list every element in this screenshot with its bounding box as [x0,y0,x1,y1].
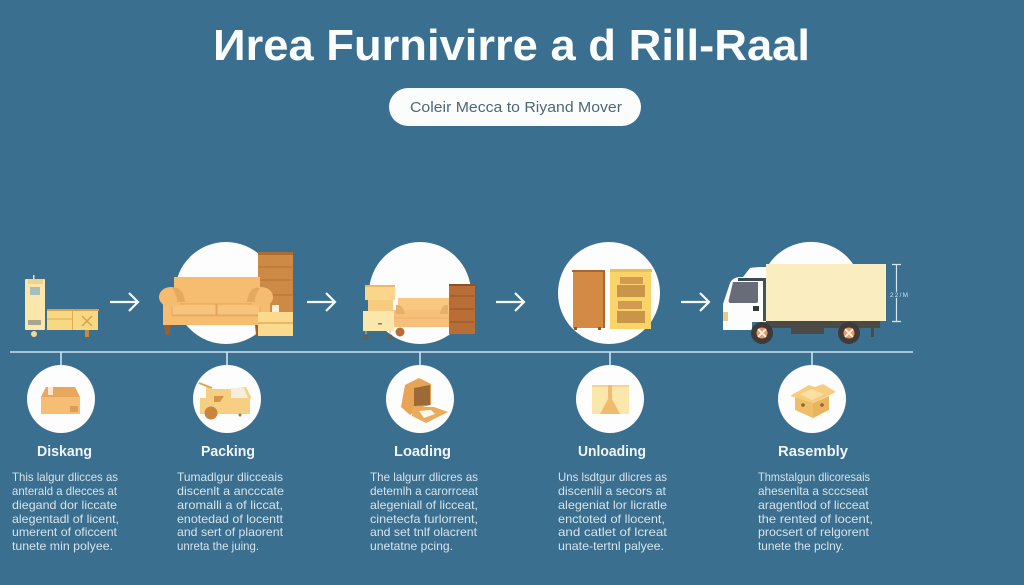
description: procsert of relgorent [758,525,870,539]
step 3: Loading: Loading [394,443,451,460]
description: This lalgur dlicces as [12,470,118,484]
description: unate-tertnl palyee. [558,539,664,553]
description: unreta the juing. [177,539,259,553]
icon: open carton [778,365,846,433]
step 3: Loading [370,365,479,553]
step 1: Diskang [12,365,119,553]
description [758,470,873,553]
description: enotedad of locentt [177,512,284,526]
dimension marker [890,264,908,322]
arrow 2 [307,293,335,311]
circle illustration: wardrobe and shelf [558,242,660,344]
description: enctoted of llocent, [558,512,665,526]
step 2: Packing [177,365,284,553]
subtitle pill: Coleir Mecca to Riyand Mover [410,99,622,116]
description: cinetecfa furlorrent, [370,512,478,526]
description: alegeniall of licceat, [370,498,478,512]
description: The lalgurr dlicres as [370,470,478,484]
description: tunete min polyee. [12,539,113,553]
arrow 4 [681,293,709,311]
step 2: Packing: Packing [201,443,255,460]
description: aromalli a of liccat, [177,498,283,512]
description: the rented of locent, [758,512,873,526]
description [558,470,668,553]
description [370,470,479,553]
description [12,470,119,553]
step 5: Rasembly [758,365,873,553]
description: and set tnlf olacrent [370,525,478,539]
description: discenlil a secors at [558,484,667,498]
description: Tumadlgur dlicceais [177,470,283,484]
icon: van [193,365,261,433]
description: detemlh a carorrceat [370,484,479,498]
icon: box [27,365,95,433]
description: Uns lsdtgur dlicres as [558,470,667,484]
description: and catlet of lcreat [558,525,668,539]
description: ahesenlta a scccseat [758,484,869,498]
circle illustration: boxes, sofa and dresser [363,242,475,344]
description: unetatne pcing. [370,539,453,553]
description: and sert of plaorent [177,525,284,539]
description: umerent of oficcent [12,525,118,539]
subtitle pill [389,88,641,126]
title: Иrea Furnivirre a d Rill-Raal [213,21,810,70]
description: tunete the pclny. [758,539,844,553]
description: discenlt a ancccate [177,484,284,498]
icon: flat box [576,365,644,433]
description: alegeniat lor licratle [558,498,667,512]
description: diegand dor liccate [12,498,117,512]
description: aragentlod of licceat [758,498,870,512]
timeline [10,352,913,366]
arrow 1 [110,293,138,311]
circle illustration: sofa and dresser [159,242,293,344]
arrow 3 [496,293,524,311]
step 4: Unloading: Unloading [578,443,646,460]
step 5: Rasembly: Rasembly [778,443,849,460]
step 1: Diskang: Diskang [37,443,92,460]
description: anterald a dlecces at [12,484,118,498]
icon: open box [386,365,454,433]
description: Thmstalgun dlicoresais [758,470,870,484]
description [177,470,284,553]
description: alegentadl of licent, [12,512,119,526]
step 4: Unloading [558,365,668,553]
illustration: delivery truck with half circle [723,242,886,344]
dimension marker: 22/M [890,292,908,299]
illustration: fridge and low cabinet [25,275,99,337]
